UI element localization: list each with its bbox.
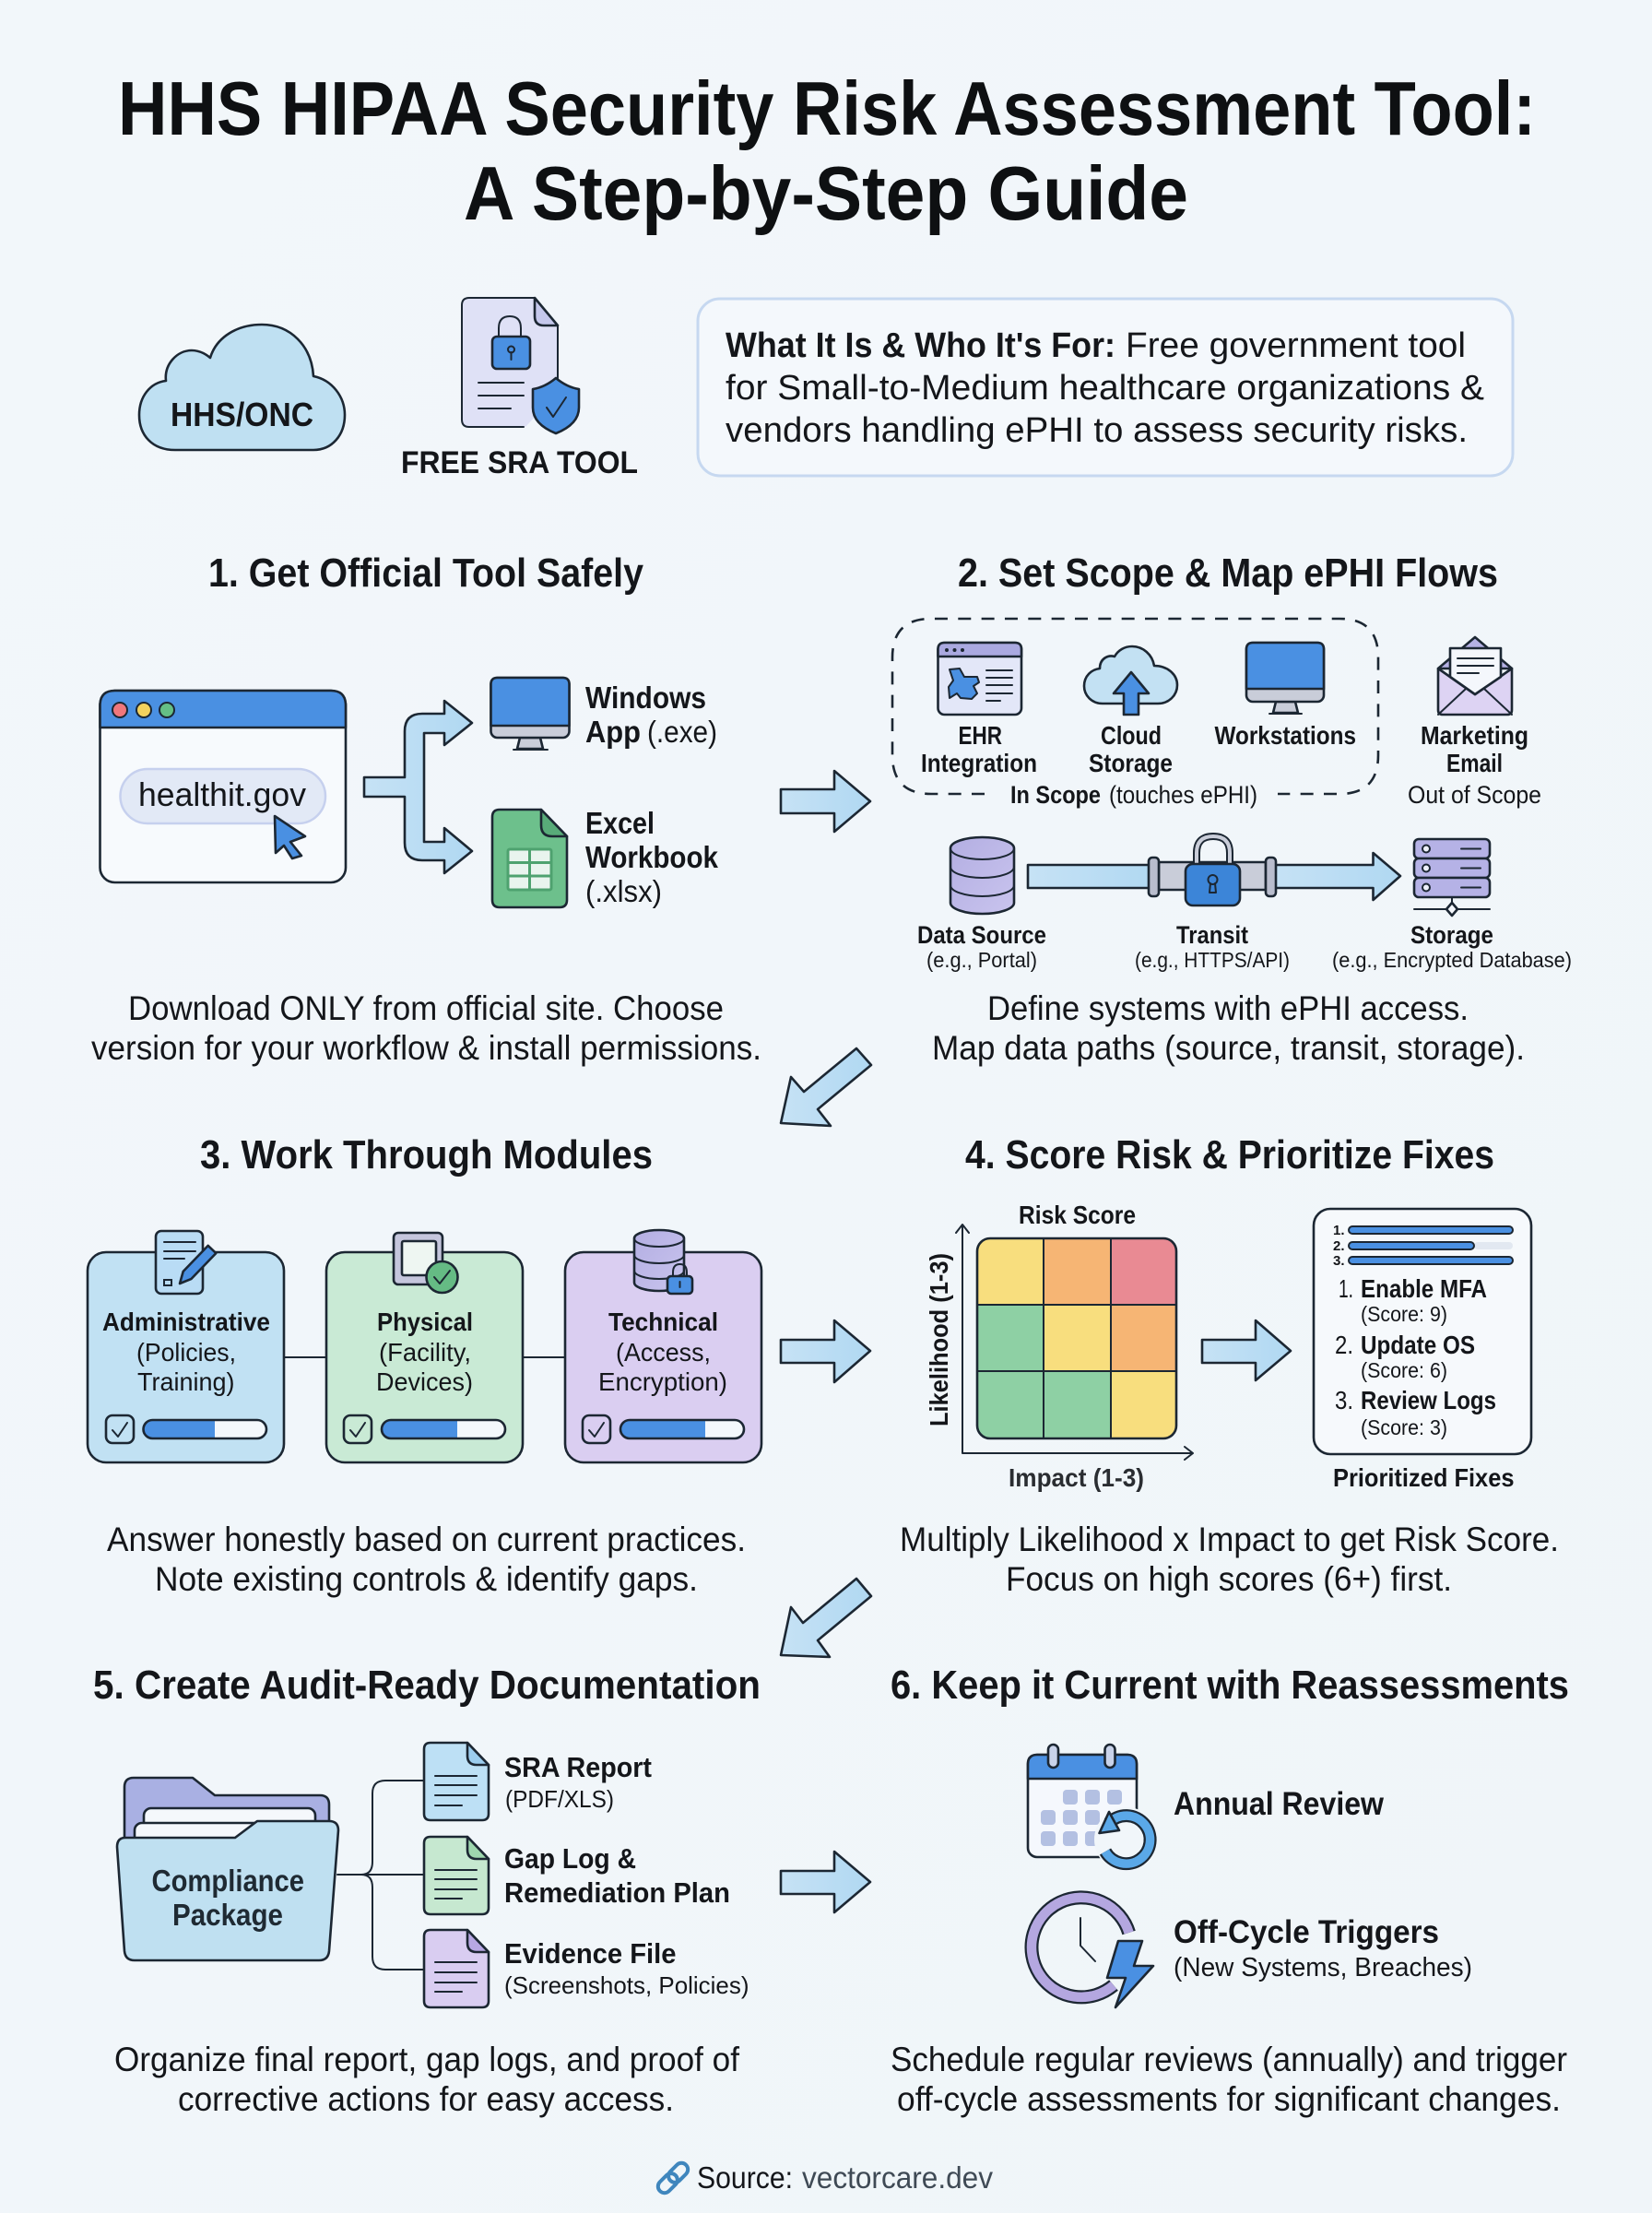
icon: free SRA tool document with lock and shield: FREE SRA TOOL (401, 445, 638, 480)
label: Excel Workbook: (.xlsx) (585, 874, 662, 908)
icon: transit padlock (1186, 836, 1240, 905)
icon: clock with lightning bolt (1032, 1898, 1153, 2007)
label: EHR Integration: EHR (959, 721, 1002, 750)
arrow: step 1 to step 2 (781, 771, 870, 832)
icon: Windows monitor (490, 678, 570, 750)
icon: marketing email envelope (1438, 637, 1512, 715)
labels: data flow stages: (e.g., HTTPS/API) (1135, 948, 1290, 972)
label: Off-Cycle Triggers: Off-Cycle Triggers (1174, 1914, 1439, 1950)
label: Evidence File: (Screenshots, Policies) (504, 1971, 749, 1999)
panel: what it is and who it's for: Free government tool (1126, 326, 1466, 365)
icon: Excel spreadsheet (492, 810, 567, 907)
label: Marketing Email, out of scope: Email (1446, 749, 1503, 777)
panel: prioritized fixes list: 3. (1333, 1253, 1345, 1269)
icon: cloud storage (1084, 646, 1177, 715)
text: step 6 description: Schedule regular reviews (annually) and trigger (891, 2041, 1567, 2078)
text: step 3 description: Note existing controls & identify gaps. (155, 1560, 698, 1598)
card: Technical (565, 1230, 761, 1462)
labels: data flow stages: (e.g., Portal) (926, 948, 1037, 972)
arrow: step 3 to step 4 (781, 1320, 870, 1382)
text: step 4 description: Focus on high scores (6+) first. (1006, 1560, 1452, 1598)
label: SRA Report: (PDF/XLS) (505, 1785, 614, 1813)
icon: compliance package folder: Compliance (151, 1864, 304, 1898)
card: Administrative: Training) (137, 1367, 234, 1396)
label: SRA Report (504, 1751, 652, 1813)
text: step 3 description (107, 1521, 746, 1598)
card: Physical: (Facility, (379, 1338, 471, 1367)
label: Windows App (585, 680, 717, 749)
panel: step 5 audit-ready documentation (93, 1663, 761, 2118)
title: A Step-by-Step Guide (464, 150, 1188, 236)
icon: link (655, 2160, 690, 2195)
heading: step 1: 1. Get Official Tool Safely (208, 550, 643, 596)
label: Gap Log and Remediation Plan: Remediation Plan (504, 1876, 730, 1909)
label: Gap Log and Remediation Plan: Gap Log & (504, 1842, 636, 1875)
label: Excel Workbook: Excel (585, 806, 655, 840)
connectors between module cards (284, 1356, 565, 1358)
icon: EHR integration (938, 643, 1021, 715)
card: Administrative: Administrative (102, 1308, 270, 1336)
panel: prioritized fixes list: 1. (1339, 1274, 1353, 1303)
chart: risk score matrix: Likelihood (1-3) (925, 1253, 953, 1426)
text: step 5 description: corrective actions for easy access. (178, 2080, 674, 2118)
labels: data flow stages: Transit (1176, 921, 1248, 949)
label: SRA Report: SRA Report (504, 1751, 652, 1783)
icon: policy document and pen (156, 1231, 216, 1294)
panel: step 4 score risk and prioritize fixes (900, 1132, 1559, 1598)
labels: data flow stages: Storage (1410, 921, 1493, 949)
label: Windows App: App (585, 715, 641, 749)
panel: what it is and who it's for: for Small-to-Medium healthcare organizations & (726, 369, 1484, 408)
chart: risk score matrix: Risk Score (1019, 1201, 1136, 1229)
label: Cloud Storage: Cloud (1101, 721, 1162, 750)
label: Marketing Email, out of scope: Out of Scope (1408, 781, 1541, 809)
heading: step 2: 2. Set Scope & Map ePHI Flows (958, 550, 1498, 596)
text: step 1 description: Download ONLY from official site. Choose (128, 989, 724, 1027)
icon: evidence file document (424, 1930, 489, 2007)
arrow: step 5 to step 6 (781, 1852, 870, 1912)
label: Marketing Email, out of scope (1408, 721, 1541, 809)
text: step 1 description: version for your workflow & install permissions. (91, 1029, 761, 1067)
card: Technical: (Access, (616, 1338, 711, 1367)
icon: HHS/ONC cloud (139, 325, 345, 450)
panel: step 1 get official tool (91, 550, 761, 1067)
text: step 4 description (900, 1521, 1559, 1598)
arrow: matrix to fixes (1202, 1320, 1291, 1380)
icon: storage server (1414, 839, 1490, 916)
panel: prioritized fixes list: (Score: 6) (1361, 1358, 1447, 1382)
labels: data flow stages (917, 921, 1572, 972)
label: Evidence File: Evidence File (504, 1937, 677, 1970)
icon: browser window with healthit.gov (100, 691, 346, 882)
heading: step 6: 6. Keep it Current with Reassessments (891, 1663, 1569, 1708)
card: Physical: Physical (377, 1308, 473, 1336)
label: EHR Integration (921, 721, 1037, 777)
panel: what it is and who it's for (698, 299, 1513, 476)
card: Physical: Devices) (376, 1367, 473, 1396)
label: Cloud Storage: Storage (1089, 749, 1173, 777)
text: step 1 description (91, 989, 761, 1067)
icon: data source database (950, 837, 1014, 914)
label: Excel Workbook: Workbook (585, 840, 719, 874)
label: Windows App: Windows (585, 680, 706, 715)
arrow: step 2 to step 3 (781, 1048, 871, 1126)
chart: risk score matrix: Impact (1-3) (1009, 1463, 1144, 1492)
panel: prioritized fixes list (1314, 1209, 1531, 1454)
icon: calendar with refresh (1028, 1745, 1159, 1872)
in-scope dashed boundary (892, 619, 1378, 794)
icon: SRA report document (424, 1743, 489, 1820)
panel: prioritized fixes list: 2. (1335, 1331, 1353, 1359)
panel: prioritized fixes list: Enable MFA (1361, 1274, 1487, 1303)
panel: step 6 reassessments (891, 1663, 1569, 2118)
icon: device with check (394, 1233, 457, 1293)
connectors: package to files (337, 1781, 424, 1970)
text: step 3 description: Answer honestly based on current practices. (107, 1521, 746, 1558)
icon: gap log document (424, 1837, 489, 1914)
label: EHR Integration: Integration (921, 749, 1037, 777)
panel: prioritized fixes list: (Score: 9) (1361, 1302, 1447, 1326)
label: Cloud Storage (1089, 721, 1173, 777)
label: Off-Cycle Triggers (1174, 1914, 1472, 1982)
heading: step 4: 4. Score Risk & Prioritize Fixes (965, 1132, 1494, 1178)
arrow: branch to two versions (364, 701, 472, 873)
label: Off-Cycle Triggers: (New Systems, Breaches) (1174, 1953, 1472, 1982)
source footer: Source: (697, 2160, 793, 2195)
label: Prioritized Fixes: Prioritized Fixes (1333, 1463, 1514, 1492)
card: Administrative (88, 1231, 284, 1462)
labels: data flow stages: Data Source (917, 921, 1046, 949)
panel: prioritized fixes list: Update OS (1361, 1331, 1475, 1359)
panel: prioritized fixes list: 1. (1333, 1223, 1345, 1238)
panel: what it is and who it's for: vendors handling ePHI to assess security risks. (726, 411, 1468, 450)
label: Windows App: (.exe) (647, 715, 717, 749)
panel: prioritized fixes list: (Score: 3) (1361, 1415, 1447, 1439)
panel: prioritized fixes list: 2. (1333, 1238, 1345, 1254)
text: step 5 description (114, 2041, 740, 2118)
card: Technical: Technical (608, 1308, 718, 1336)
chart: risk score matrix (925, 1201, 1193, 1492)
icon: free SRA tool document with lock and shield (401, 298, 638, 480)
panel: prioritized fixes list: Review Logs (1361, 1386, 1496, 1414)
source footer: vectorcare.dev (802, 2160, 993, 2195)
text: step 6 description (891, 2041, 1567, 2118)
card: Physical (326, 1233, 523, 1462)
text: step 2 description (932, 989, 1525, 1067)
icon: database with lock (634, 1230, 692, 1294)
heading: step 5: 5. Create Audit-Ready Documentation (93, 1663, 761, 1708)
label: In Scope: (touches ePHI) (1109, 781, 1257, 809)
label: Workstations: Workstations (1215, 721, 1356, 750)
text: step 2 description: Define systems with ePHI access. (987, 989, 1469, 1027)
label: Annual Review: Annual Review (1174, 1786, 1385, 1822)
card: Technical: Encryption) (598, 1367, 727, 1396)
panel: step 2 set scope and map ePHI flows (892, 550, 1572, 1067)
title (118, 65, 1536, 236)
text: step 5 description: Organize final report, gap logs, and proof of (114, 2041, 740, 2078)
source footer (655, 2160, 993, 2195)
card: Administrative: (Policies, (136, 1338, 236, 1367)
label: In Scope: In Scope (1010, 781, 1101, 809)
text: step 4 description: Multiply Likelihood x Impact to get Risk Score. (900, 1521, 1559, 1558)
icon: compliance package folder (117, 1778, 338, 1960)
label: Evidence File (504, 1937, 749, 1999)
icon: browser window with healthit.gov: healthit.gov (138, 775, 306, 813)
label: Excel Workbook (585, 806, 719, 908)
arrow: step 4 to step 5 (781, 1579, 871, 1657)
labels: data flow stages: (e.g., Encrypted Database) (1332, 948, 1572, 972)
label: Gap Log and Remediation Plan (504, 1842, 730, 1909)
icon: compliance package folder: Package (172, 1898, 283, 1932)
text: step 6 description: off-cycle assessments for significant changes. (897, 2080, 1561, 2118)
panel: what it is and who it's for: What It Is & Who It's For: (726, 326, 1115, 365)
label: Marketing Email, out of scope: Marketing (1421, 721, 1528, 750)
text: step 2 description: Map data paths (source, transit, storage). (932, 1029, 1525, 1067)
heading: step 3: 3. Work Through Modules (200, 1132, 653, 1178)
label: In Scope (1010, 781, 1257, 809)
icon: HHS/ONC cloud: HHS/ONC (171, 396, 313, 433)
panel: prioritized fixes list: 3. (1335, 1386, 1353, 1414)
icon: workstation monitor (1246, 643, 1324, 714)
arrow: encrypted data flow (1028, 853, 1400, 900)
panel: step 3 work through modules (88, 1132, 761, 1598)
